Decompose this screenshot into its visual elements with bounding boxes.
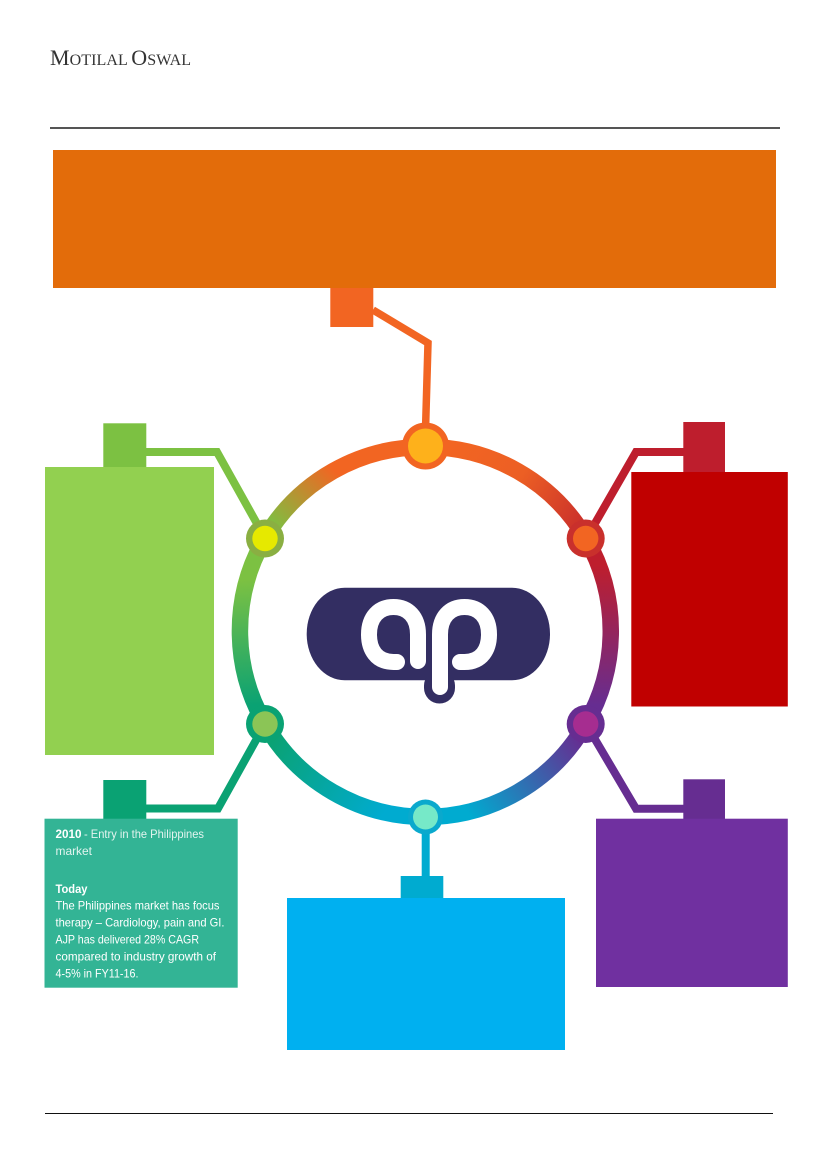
panel: Philippines xyxy=(44,780,238,988)
tab: red xyxy=(683,422,725,472)
header rule xyxy=(50,127,780,129)
connector: top xyxy=(373,310,428,430)
tab: top orange xyxy=(330,288,373,327)
text: Philippines entry: - Entry in the Philippines xyxy=(84,827,204,841)
tab: green xyxy=(103,423,146,467)
connector: bottom xyxy=(422,820,430,877)
node: upper left xyxy=(246,520,284,558)
tab: purple xyxy=(683,779,725,819)
text: Philippines entry: 2010 xyxy=(56,827,82,841)
tab: teal xyxy=(103,780,146,819)
footer rule xyxy=(45,1113,773,1114)
text: Philippines entry: The Philippines market has focus xyxy=(56,898,220,912)
panel: bottom blue xyxy=(287,876,565,1050)
logo: AJP xyxy=(307,588,550,704)
panel: lower right purple xyxy=(596,779,788,987)
text: Philippines entry: AJP has delivered 28% CAGR xyxy=(56,932,199,946)
node: top xyxy=(402,422,449,470)
panel: top orange xyxy=(53,150,776,327)
text: Philippines entry: therapy – Cardiology, pain and GI. xyxy=(56,916,224,930)
header: brand name: MOTILAL OSWAL xyxy=(50,45,191,70)
connector: upper left xyxy=(146,452,265,538)
node: upper right xyxy=(567,520,605,558)
text: Philippines entry: Today xyxy=(56,882,88,896)
connector: lower left xyxy=(146,724,265,808)
node: lower left xyxy=(246,705,284,743)
node: lower right xyxy=(567,705,605,743)
text: Philippines entry: market xyxy=(56,844,93,858)
connector: lower right xyxy=(586,724,684,809)
panel: right red xyxy=(631,422,788,706)
ring: gradient arcs xyxy=(240,447,611,817)
text: Philippines entry: 4-5% in FY11-16. xyxy=(56,966,138,980)
text: Philippines entry: compared to industry growth of xyxy=(56,950,217,964)
connector: upper right xyxy=(586,452,684,539)
tab: cyan xyxy=(401,876,443,898)
node: bottom xyxy=(408,800,443,834)
panel: left green xyxy=(45,423,214,755)
